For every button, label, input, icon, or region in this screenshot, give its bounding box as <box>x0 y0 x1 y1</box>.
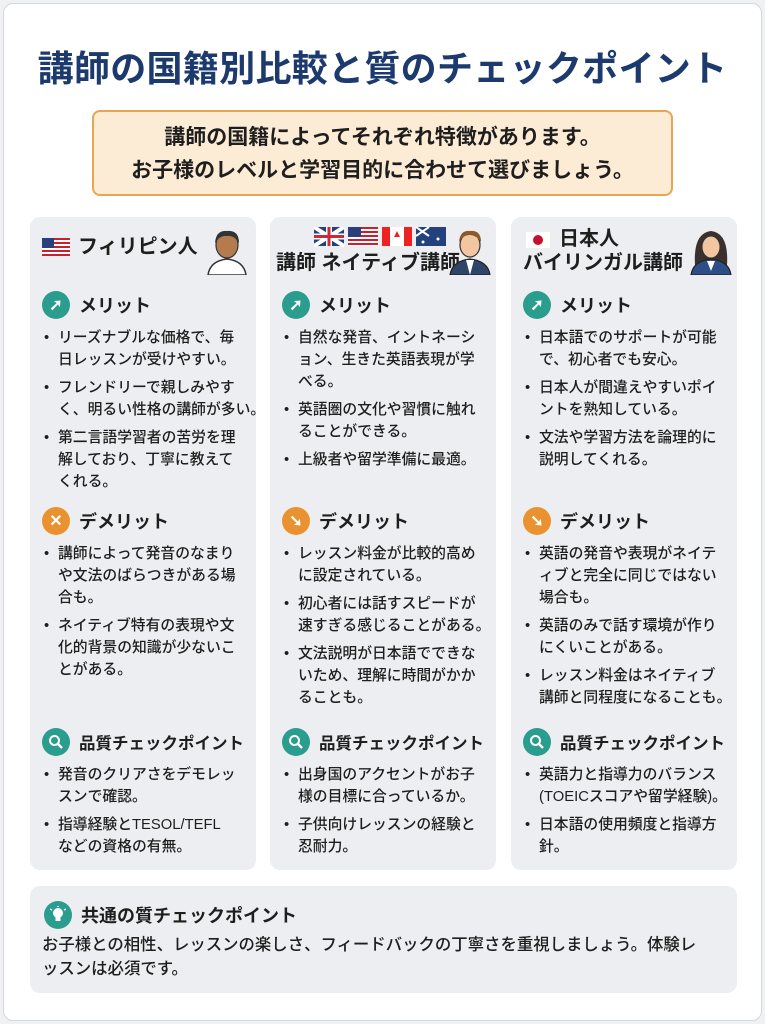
list: merit <box>526 329 717 468</box>
section: quality <box>42 728 244 756</box>
list: demerit: や文法のばらつきがある場 <box>58 568 236 584</box>
section: merit: メリット <box>560 296 632 316</box>
list: demerit <box>526 545 731 706</box>
list: merit: 解しており、丁寧に教えて <box>58 452 233 468</box>
text: common <box>42 936 696 978</box>
callout: お子様のレベルと学習目的に合わせて選びましょう。 <box>131 159 634 182</box>
list: quality: 忍耐力。 <box>298 839 357 855</box>
list: merit <box>44 329 265 490</box>
title: 講師の国籍別比較と質のチェックポイント <box>38 48 727 89</box>
section: quality: 品質チェックポイント <box>79 735 244 753</box>
text: common: お子様との相性、レッスンの楽しさ、フィードバックの丁寧さを重視しましょう。体験レ <box>42 936 696 954</box>
list: merit: 自然な発音、イントネーシ <box>298 330 475 346</box>
list: quality: 様の目標に合っているか。 <box>298 789 475 805</box>
section: quality: 品質チェックポイント <box>319 735 484 753</box>
list: quality: 発音のクリアさをデモレッ <box>58 767 236 783</box>
list: demerit: にくいことがある。 <box>539 640 672 656</box>
list: merit: ョン、生きた英語表現が学 <box>298 352 475 368</box>
panel: native <box>270 217 496 870</box>
list: merit <box>284 329 476 468</box>
section: merit: メリット <box>319 296 391 316</box>
list: demerit: 速すぎる感じることがある。 <box>298 618 490 634</box>
list: merit: 日レッスンが受けやすい。 <box>58 352 236 368</box>
list: merit: フレンドリーで親しみやす <box>58 380 235 396</box>
list: merit: べる。 <box>298 374 342 390</box>
list: merit: 日本人が間違えやすいポイ <box>539 380 717 396</box>
list: demerit: ることも。 <box>298 690 372 706</box>
section: common heading: 共通の質チェックポイント <box>81 906 297 926</box>
list: merit: く、明るい性格の講師が多い。 <box>58 402 265 418</box>
list: demerit: 講師と同程度になることも。 <box>539 690 731 706</box>
section: quality <box>282 728 484 756</box>
section: demerit: ➘ <box>530 513 544 530</box>
section: demerit: ✕ <box>49 513 63 530</box>
panel: japanese <box>511 217 737 870</box>
section: merit <box>42 291 151 319</box>
list: quality: 日本語の使用頻度と指導方 <box>539 817 717 833</box>
section: quality <box>523 728 725 756</box>
list: quality: スンで確認。 <box>58 789 147 805</box>
callout <box>92 110 673 196</box>
section: demerit: デメリット <box>560 512 650 532</box>
section: demerit <box>523 507 650 535</box>
panel: japanese: 日本人 <box>559 228 619 250</box>
list: demerit: 英語の発音や表現がネイテ <box>539 546 716 562</box>
section: quality: 品質チェックポイント <box>560 735 725 753</box>
heading: native <box>276 227 460 274</box>
list: quality: 指導経験とTESOL/TEFL <box>58 817 221 833</box>
list: merit: リーズナブルな価格で、毎 <box>58 330 234 346</box>
section: merit: メリット <box>79 296 151 316</box>
section: demerit: デメリット <box>79 512 169 532</box>
text: common: ッスンは必須です。 <box>42 960 188 978</box>
list: demerit: いため、理解に時間がかか <box>298 668 476 684</box>
list: quality <box>526 766 727 855</box>
list: merit: ることができる。 <box>298 424 416 440</box>
list: demerit: とがある。 <box>58 662 132 678</box>
list: merit: ントを熟知している。 <box>539 402 687 418</box>
list: merit: くれる。 <box>58 474 117 490</box>
list: quality: 出身国のアクセントがお子 <box>298 767 475 783</box>
list: demerit: ィブと完全に同じではない <box>539 568 717 584</box>
panel: japanese: バイリンガル講師 <box>523 252 683 274</box>
list: merit: 説明してくれる。 <box>539 452 656 468</box>
section: merit: ➚ <box>49 297 63 314</box>
list: demerit: 英語のみで話す環境が作り <box>539 618 717 634</box>
list: quality: 針。 <box>539 839 569 855</box>
list: demerit <box>284 545 490 706</box>
list: demerit: 講師によって発音のなまり <box>58 546 234 562</box>
section: common heading <box>44 901 297 929</box>
callout: 講師の国籍によってそれぞれ特徴があります。 <box>164 126 601 149</box>
list: quality: などの資格の有無。 <box>58 839 191 855</box>
heading: japanese <box>523 228 683 274</box>
list: merit: 上級者や留学準備に最適。 <box>298 452 476 468</box>
list: demerit: 合も。 <box>58 590 102 606</box>
panel: philippines <box>30 217 256 870</box>
list: merit: 文法や学習方法を論理的に <box>539 430 717 446</box>
icon: avatar woman <box>690 231 732 275</box>
section: demerit: ➘ <box>289 513 303 530</box>
list: demerit: ネイティブ特有の表現や文 <box>58 618 234 634</box>
icon: japan flag <box>525 231 551 249</box>
panel: native: 講師 ネイティブ講師 <box>276 252 460 274</box>
icon: avatar man <box>207 230 247 275</box>
list: quality: 英語力と指導力のバランス <box>539 767 716 783</box>
list: demerit: 化的背景の知識が少ないこ <box>58 640 236 656</box>
list: quality: 子供向けレッスンの経験と <box>298 817 476 833</box>
list: demerit: レッスン料金が比較的高め <box>298 546 476 562</box>
list: demerit: 場合も。 <box>539 590 598 606</box>
section: merit <box>523 291 632 319</box>
list: merit: 第二言語学習者の苦労を理 <box>58 430 236 446</box>
list: demerit: に設定されている。 <box>298 568 431 584</box>
icon: avatar suit man <box>449 230 491 275</box>
section: demerit <box>282 507 409 535</box>
list: quality: (TOEICスコアや留学経験)。 <box>539 789 727 805</box>
list: merit: 日本語でのサポートが可能 <box>539 330 717 346</box>
section: demerit <box>42 507 169 535</box>
list: merit: 英語圏の文化や習慣に触れ <box>298 402 476 418</box>
section: merit: ➚ <box>530 297 544 314</box>
panel: common checkpoint <box>30 886 737 993</box>
icon: flags <box>314 227 446 247</box>
list: demerit <box>44 545 236 678</box>
list: demerit: レッスン料金はネイティブ <box>539 668 715 684</box>
section: merit <box>282 291 391 319</box>
section: demerit: デメリット <box>319 512 409 532</box>
heading: philippines: フィリピン人 <box>78 236 198 258</box>
list: demerit: 初心者には話すスピードが <box>298 596 476 612</box>
list: quality <box>44 766 236 855</box>
list: merit: で、初心者でも安心。 <box>539 352 686 368</box>
list: quality <box>284 766 476 855</box>
list: demerit: 文法説明が日本語でできな <box>298 646 476 662</box>
section: merit: ➚ <box>289 297 303 314</box>
